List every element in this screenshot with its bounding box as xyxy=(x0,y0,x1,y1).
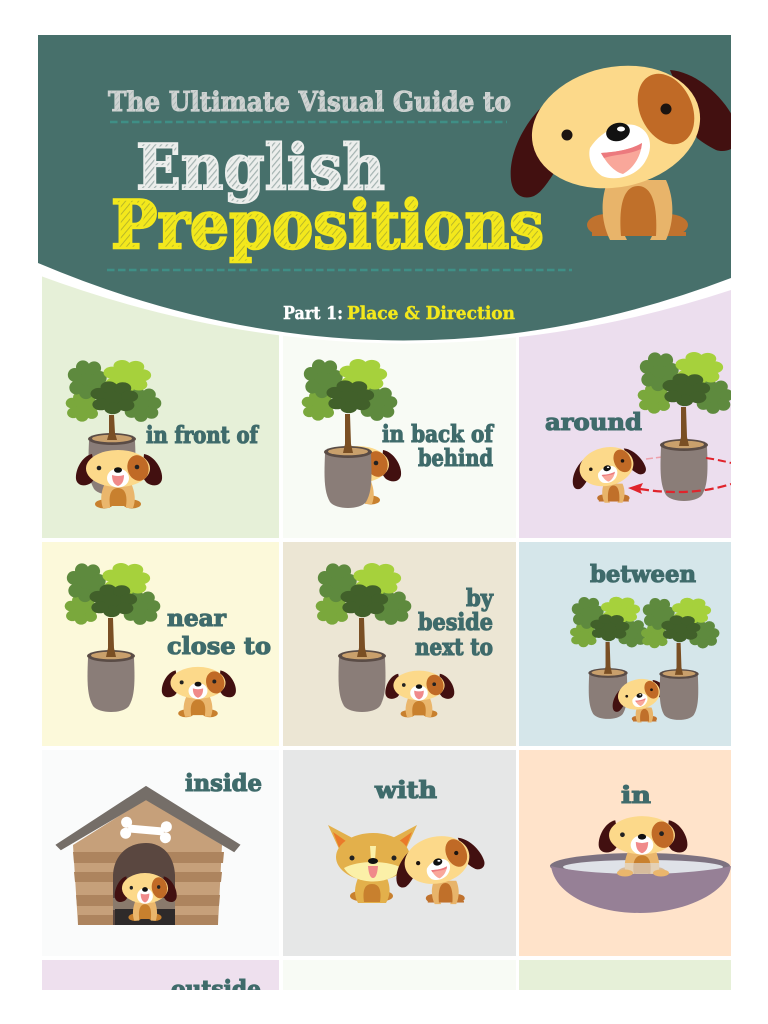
panel: outside: outside xyxy=(171,976,261,1003)
panel: in back of / behind: behind xyxy=(418,445,493,472)
doghouse xyxy=(57,787,239,925)
panel: with xyxy=(283,750,516,956)
panel: near / close to: near xyxy=(167,605,227,632)
subtitle: Part 1: Part 1: xyxy=(283,303,343,324)
panel: inside: inside xyxy=(185,770,262,797)
panel: near / close to: close to xyxy=(167,633,271,660)
subtitle: Place and Direction: Place & Direction xyxy=(347,303,515,324)
panel: in back of / behind xyxy=(283,336,516,538)
panel: around: around xyxy=(545,409,642,436)
panel: near / close to xyxy=(42,542,279,746)
panel: by / beside / next to: beside xyxy=(418,609,493,636)
panel: bottom middle xyxy=(283,960,516,990)
panel: in front of xyxy=(42,270,279,538)
dashed rule bottom xyxy=(107,269,572,271)
panel: bottom right xyxy=(519,960,731,990)
heading: The Ultimate Visual Guide to: The Ultimate Visual Guide to xyxy=(108,87,511,118)
dashed rule top xyxy=(110,121,507,123)
panel: in xyxy=(519,750,731,956)
panel: in: in xyxy=(621,782,651,809)
chihuahua xyxy=(328,825,417,903)
panel: around xyxy=(519,270,733,538)
panel: outside xyxy=(42,960,279,990)
panel: in back of / behind: in back of xyxy=(382,421,495,448)
panel: in front of: in front of xyxy=(146,422,260,449)
heading: English: English xyxy=(136,130,385,204)
panel: by / beside / next to: next to xyxy=(415,634,493,661)
bowl xyxy=(550,816,731,913)
heading: Prepositions: Prepositions xyxy=(111,186,544,264)
panel: between: between xyxy=(590,561,696,588)
header banner xyxy=(38,35,739,343)
panel: with: with xyxy=(374,777,437,804)
panel: by / beside / next to: by xyxy=(466,585,494,612)
panel: inside xyxy=(56,772,262,925)
icon: large puppy xyxy=(510,66,731,240)
panel: between xyxy=(519,542,731,746)
panel grid xyxy=(42,270,733,1003)
panel: by / beside / next to xyxy=(283,542,516,746)
